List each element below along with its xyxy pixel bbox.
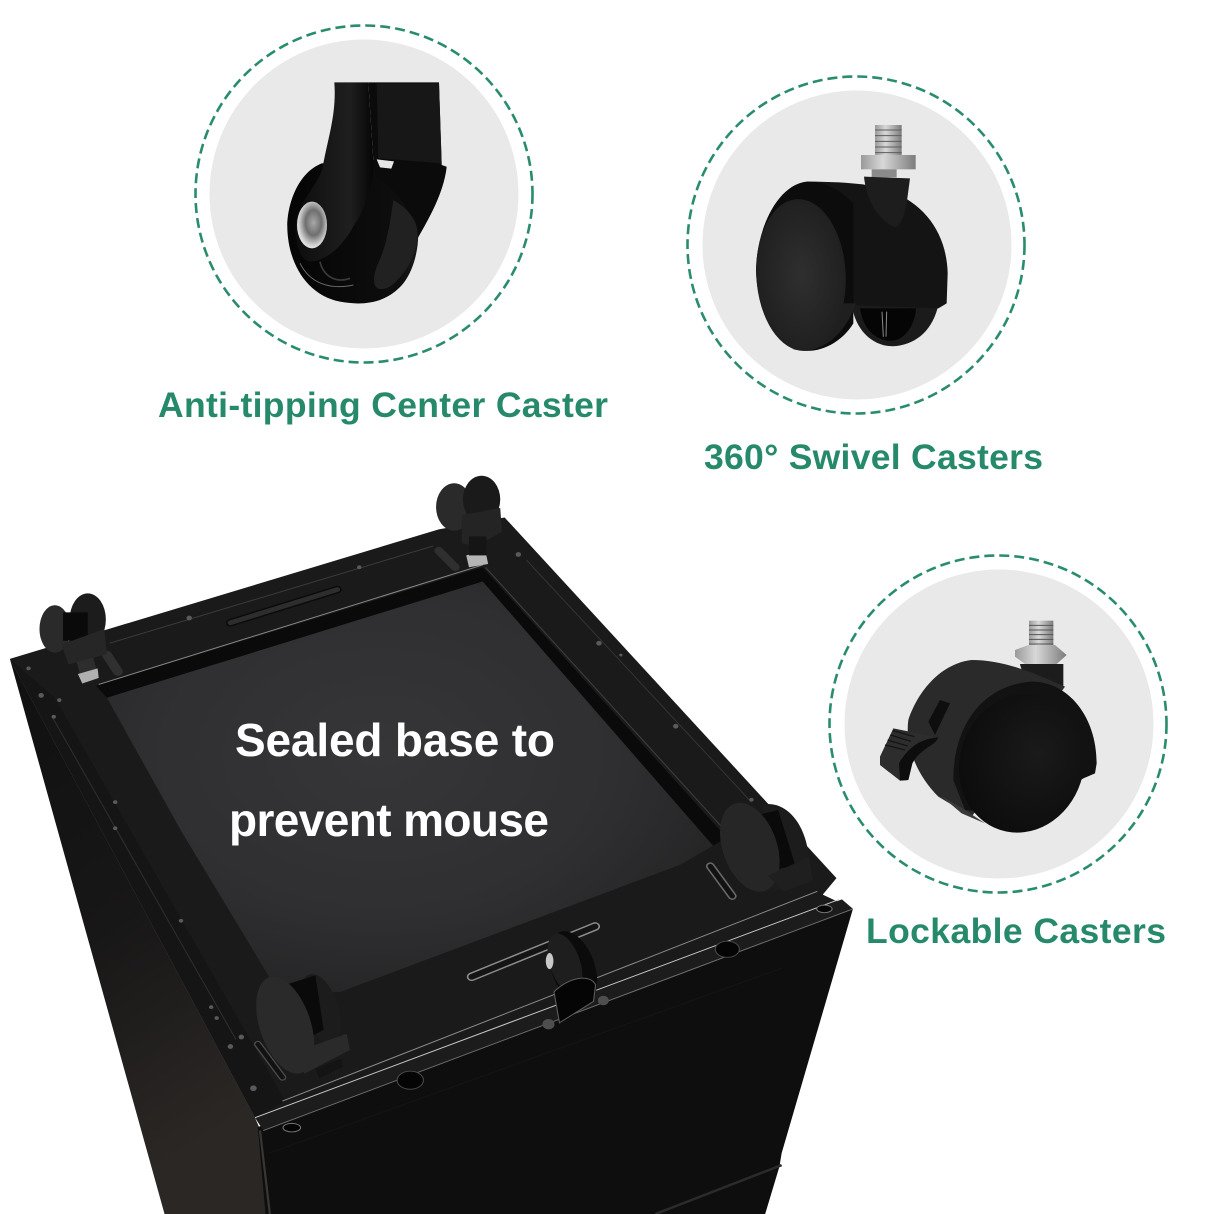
center anti-tip caster [541,927,609,1029]
callout: 360 swivel casters [688,76,1024,414]
caster: front left [245,970,350,1079]
callout: anti-tipping center caster [196,26,532,362]
caster: front right [710,797,813,897]
callout: lockable casters [830,556,1166,892]
caption on base [229,714,555,846]
label: 360 swivel casters: 360° Swivel Casters [704,437,1043,477]
icon: swivel caster [752,125,948,353]
caster: back right [436,476,502,567]
label: anti-tipping center caster: Anti-tipping Center Caster [158,385,608,425]
label: lockable casters: Lockable Casters [866,911,1166,951]
front band with holes [255,891,853,1132]
base frame [10,517,853,1118]
gray disc [844,570,1154,878]
base text line 1: Sealed base to [235,714,555,766]
dashed ring [688,76,1024,414]
icon: lockable caster [880,621,1102,849]
mounting slots and rivets [26,551,754,1091]
cabinet front face [258,909,853,1214]
dashed ring [830,556,1166,892]
dashed ring [196,26,532,362]
cabinet left side face [10,659,270,1214]
gray disc [702,90,1012,400]
gray disc [210,40,518,348]
cabinet photo: sealed base [10,476,853,1214]
caster: back left [39,593,107,684]
icon: center caster [287,82,447,303]
base text line 2: prevent mouse [229,794,549,846]
sealed base inner panel [107,582,713,994]
